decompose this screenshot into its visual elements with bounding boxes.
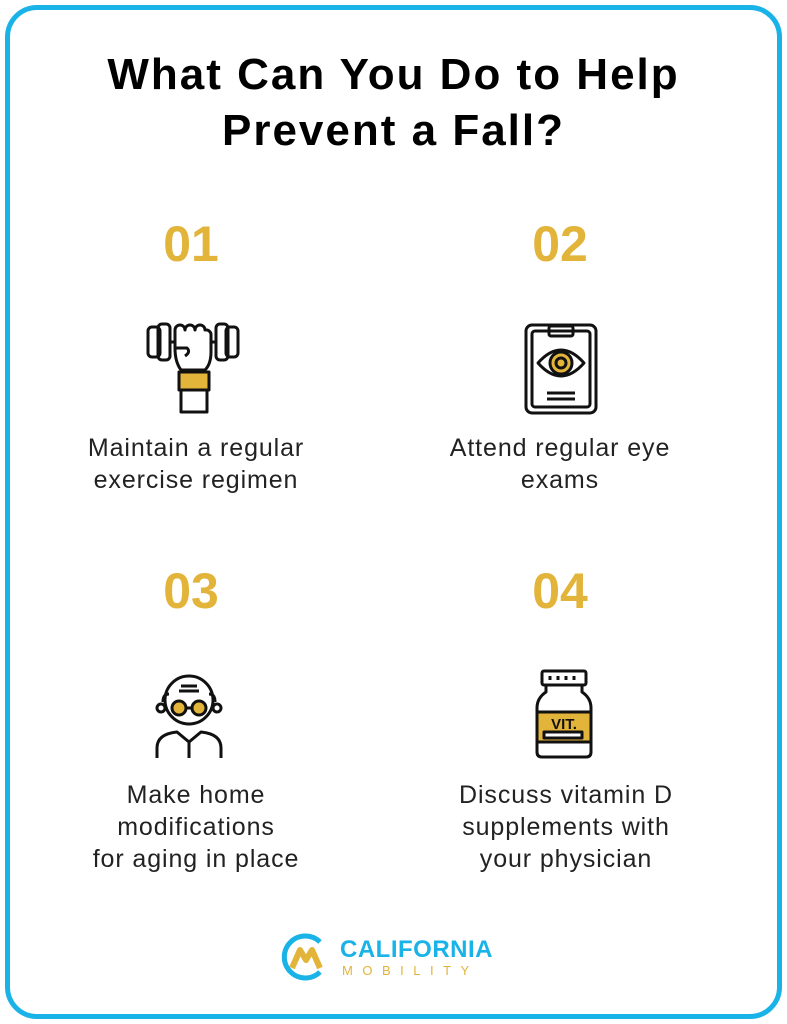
title: What Can You Do to Help — [107, 50, 680, 99]
text 02: Attend regular eye — [450, 434, 670, 462]
icon: tablet eye — [524, 324, 598, 414]
logo text: CALIFORNIA — [340, 936, 493, 963]
icon: dumbbell fist — [146, 322, 240, 414]
text 04: your physician — [480, 845, 652, 873]
text 02 — [450, 434, 670, 494]
icon: vitamin bottle: VIT. — [551, 716, 577, 733]
text 01: exercise regimen — [94, 466, 298, 494]
icon: elderly man — [156, 674, 222, 758]
text 03: Make home — [127, 781, 265, 809]
icon: vitamin bottle — [536, 670, 592, 758]
title: Prevent a Fall? — [222, 106, 565, 155]
number 04: 04 — [532, 563, 588, 619]
logo mark — [282, 934, 323, 980]
text 04: supplements with — [462, 813, 670, 841]
number 01: 01 — [163, 216, 219, 272]
text 02: exams — [521, 466, 599, 494]
text 03: modifications — [117, 813, 275, 841]
number 02: 02 — [532, 216, 588, 272]
text 03: for aging in place — [93, 845, 299, 873]
logo — [282, 934, 493, 980]
text 03 — [93, 781, 299, 873]
text 04: Discuss vitamin D — [459, 781, 673, 809]
title — [107, 50, 680, 155]
text 01 — [88, 434, 304, 494]
text 04 — [459, 781, 673, 873]
number 03: 03 — [163, 563, 219, 619]
text 01: Maintain a regular — [88, 434, 304, 462]
logo: MOBILITY — [342, 963, 479, 978]
